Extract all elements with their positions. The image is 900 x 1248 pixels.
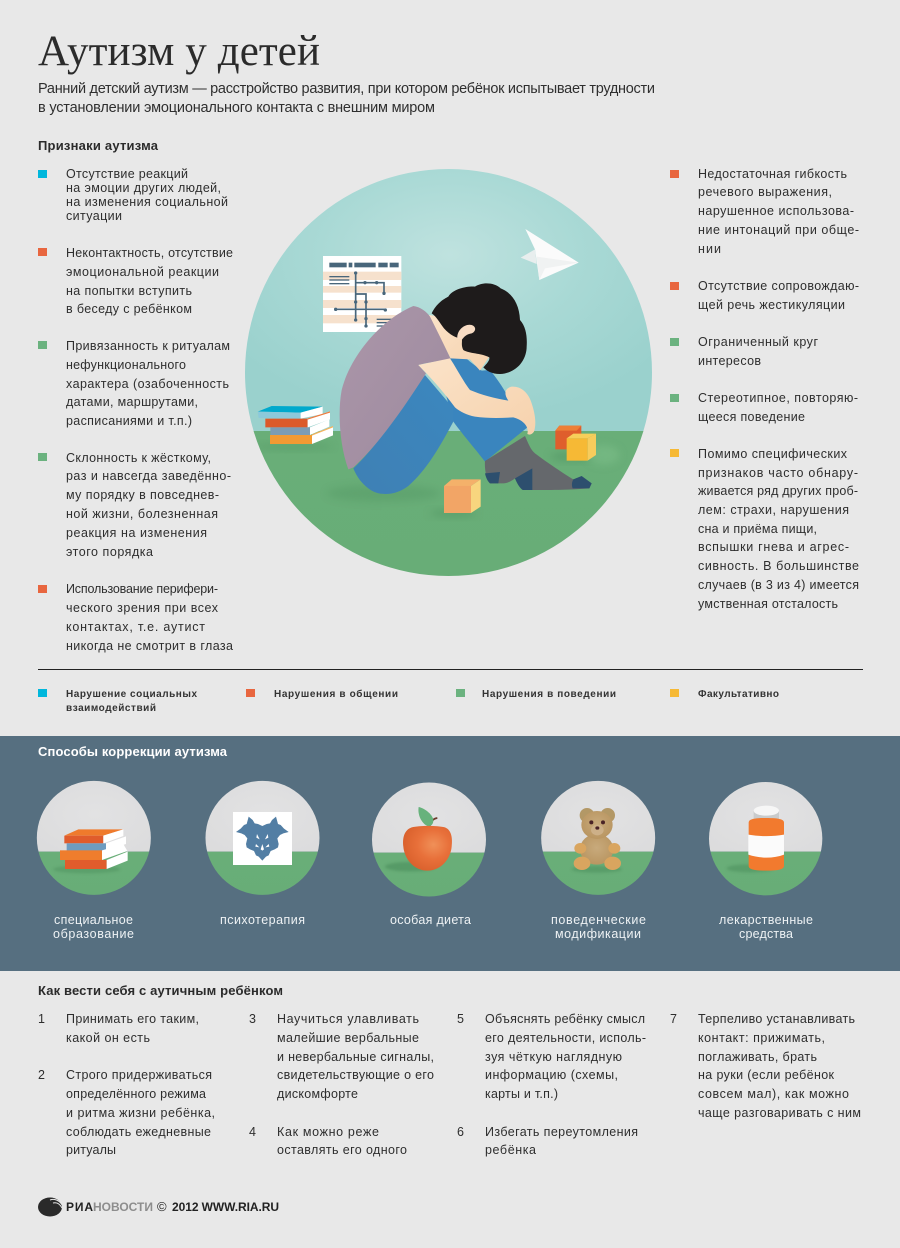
tip 5: зуя чёткую наглядную	[485, 1050, 622, 1064]
sign r5: лем: страхи, нарушения	[698, 503, 849, 517]
icon: apple	[370, 780, 490, 899]
caption: behaviour: поведенческие	[551, 913, 646, 927]
sign 5: никогда не смотрит в глаза	[66, 639, 233, 653]
legend: Нарушения в поведении	[482, 689, 616, 700]
tip 7: совсем мал), как можно	[698, 1087, 849, 1101]
tip 2: определённого режима	[66, 1087, 206, 1101]
tip 6: ребёнка	[485, 1143, 536, 1157]
sign 3	[38, 339, 230, 428]
sign 1: на эмоции других людей,	[66, 181, 221, 195]
tip 2: Строго придерживаться	[66, 1068, 212, 1082]
tip 4	[249, 1125, 407, 1157]
floor	[254, 431, 644, 576]
sign 2: на попытки вступить	[66, 284, 192, 298]
sign 1: на изменения социальной	[66, 195, 228, 209]
tip 2: и ритма жизни ребёнка,	[66, 1106, 215, 1120]
tip 5	[457, 1012, 646, 1101]
sign r1: нии	[698, 242, 721, 256]
main illustration: child in circle	[240, 160, 660, 581]
wall	[240, 160, 660, 431]
subtitle: Ранний детский аутизм — расстройство развития, при котором ребёнок испытывает трудности	[38, 81, 655, 97]
sign r1: ние интонаций при обще-	[698, 223, 859, 237]
tip 3: малейшие вербальные	[277, 1031, 419, 1045]
footer logo: 2012 WWW.RIA.RU	[172, 1200, 279, 1214]
tip 3: 3	[249, 1012, 256, 1026]
sign 2	[38, 246, 233, 316]
icon: stack of books	[258, 406, 333, 444]
sign 4	[38, 451, 231, 559]
far leg	[440, 355, 528, 462]
sign 4: Склонность к жёсткому,	[66, 451, 211, 465]
sign 2: в беседу с ребёнком	[66, 302, 192, 316]
sign r2	[670, 279, 859, 312]
sign r5: сна и приёма пищи,	[698, 522, 817, 536]
caption: behaviour	[551, 913, 646, 941]
poster: timetable	[323, 256, 401, 332]
sign 5	[38, 582, 233, 653]
legend: взаимодействий	[66, 703, 156, 714]
near leg	[353, 375, 453, 494]
tip 1	[38, 1012, 199, 1045]
sign r5: живается ряд других проб-	[698, 484, 858, 498]
sign 3: характера (озабоченность	[66, 377, 229, 391]
sign 4: раз и навсегда заведённо-	[66, 469, 231, 483]
caption: medication: лекарственные	[719, 913, 813, 927]
tip 5: карты и т.п.)	[485, 1087, 558, 1101]
sign r1: речевого выражения,	[698, 185, 832, 199]
sign 4: реакция на изменения	[66, 526, 207, 540]
arm	[418, 358, 535, 435]
tip 2: 2	[38, 1068, 45, 1082]
sign r5: вспышки гнева и агрес-	[698, 540, 849, 554]
sign r5: сивность. В большинстве	[698, 559, 859, 573]
hair	[432, 283, 527, 374]
panel: correction methods	[0, 736, 900, 971]
tip 7: поглаживать, брать	[698, 1050, 817, 1064]
sign r4: Стереотипное, повторяю-	[698, 391, 858, 405]
footer logo	[38, 1198, 279, 1216]
subtitle: в установлении эмоционального контакта с внешним миром	[38, 100, 435, 116]
sign 1: Отсутствие реакций	[66, 167, 188, 181]
sign 4: ной жизни, болезненная	[66, 507, 218, 521]
icon: paper plane	[521, 229, 579, 280]
tip 7: контакт: прижимать,	[698, 1031, 825, 1045]
sign r4	[670, 391, 858, 424]
caption: medication: средства	[739, 927, 793, 941]
sign r5: умственная отсталость	[698, 597, 838, 611]
tip 3: свидетельствующие о его	[277, 1068, 434, 1082]
caption: education: специальное	[54, 913, 133, 927]
sign 1: ситуации	[66, 209, 122, 223]
tip 5: его деятельности, исполь-	[485, 1031, 646, 1045]
tip 1: какой он есть	[66, 1031, 150, 1045]
sign 3: Привязанность к ритуалам	[66, 339, 230, 353]
caption: behaviour: модификации	[555, 927, 641, 941]
toy block: orange	[444, 479, 481, 513]
tip 3: Научиться улавливать	[277, 1012, 419, 1026]
icon: medicine bottle	[707, 780, 825, 897]
tip 5: Объяснять ребёнку смысл	[485, 1012, 645, 1026]
subtitle	[38, 81, 655, 116]
sign r1: нарушенное использова-	[698, 204, 854, 218]
sign r3: Ограниченный круг	[698, 335, 818, 349]
tip 7: на руки (если ребёнок	[698, 1068, 835, 1082]
tip 4: 4	[249, 1125, 256, 1139]
ear	[457, 325, 475, 340]
sign r1	[670, 167, 859, 256]
tip 7	[670, 1012, 861, 1120]
tip 2: ритуалы	[66, 1143, 116, 1157]
heading: signs: Признаки аутизма	[38, 138, 159, 153]
tip 6: 6	[457, 1125, 464, 1139]
icon: teddy bear	[540, 780, 657, 897]
sign 4: этого порядка	[66, 545, 153, 559]
tip 1: 1	[38, 1012, 45, 1026]
tip 5: 5	[457, 1012, 464, 1026]
sign 5: контактах, т.е. аутист	[66, 620, 205, 634]
legend: Нарушения в общении	[274, 688, 398, 700]
sign r4: щееся поведение	[698, 410, 805, 424]
caption: medication	[719, 913, 813, 941]
sign r5: признаков часто обнару-	[698, 466, 858, 480]
legend: Нарушение социальных	[66, 689, 197, 700]
caption: psychotherapy: психотерапия	[220, 913, 305, 927]
sign 5: Использование перифери-	[66, 582, 218, 596]
tip 5: информацию (схемы,	[485, 1068, 618, 1082]
sign 3: датами, маршрутами,	[66, 395, 198, 409]
tip 7: Терпеливо устанавливать	[698, 1012, 855, 1026]
sign r1: Недостаточная гибкость	[698, 167, 847, 181]
legend: Факультативно	[698, 689, 779, 700]
caption: diet: особая диета	[390, 913, 471, 927]
footer logo: НОВОСТИ	[93, 1200, 153, 1214]
footer logo: ©	[157, 1199, 167, 1214]
toy block: red and yellow	[555, 426, 596, 461]
tip 2	[38, 1068, 215, 1157]
heading: correction: Способы коррекции аутизма	[38, 744, 228, 759]
tip 1: Принимать его таким,	[66, 1012, 199, 1026]
icon: inkblot	[206, 780, 320, 895]
sign r5	[670, 447, 859, 611]
icon: globe	[38, 1198, 62, 1216]
tip 2: соблюдать ежедневные	[66, 1125, 211, 1139]
neck and face	[428, 315, 489, 371]
sign 1	[38, 167, 228, 223]
sign r3	[670, 335, 818, 368]
sign 3: расписаниями и т.п.)	[66, 414, 192, 428]
tip 3: дискомфорте	[277, 1087, 358, 1101]
tip 4: Как можно реже	[277, 1125, 379, 1139]
tip 6: Избегать переутомления	[485, 1125, 638, 1139]
tip 3: и невербальные сигналы,	[277, 1050, 434, 1064]
socks	[485, 436, 592, 490]
footer logo: РИА	[66, 1200, 93, 1214]
tip 7: чаще разговаривать с ним	[698, 1106, 861, 1120]
caption: education: образование	[53, 927, 134, 941]
heading: how to behave: Как вести себя с аутичным ребёнком	[38, 983, 283, 998]
tip 3	[249, 1012, 434, 1101]
sign 2: эмоциональной реакции	[66, 265, 219, 279]
sign 5: ческого зрения при всех	[66, 601, 219, 615]
caption: education	[53, 913, 134, 941]
sign r5: Помимо специфических	[698, 447, 848, 461]
tip 4: оставлять его одного	[277, 1143, 407, 1157]
legend	[38, 688, 779, 714]
sign 4: му порядку в повседнев-	[66, 488, 219, 502]
child figure	[340, 283, 592, 494]
sign r2: щей речь жестикуляции	[698, 298, 845, 312]
shirt	[340, 306, 451, 469]
icon: books	[36, 780, 151, 895]
tip 7: 7	[670, 1012, 677, 1026]
tip 6	[457, 1125, 638, 1157]
title: Аутизм у детей	[38, 28, 320, 75]
sign r5: случаев (в 3 из 4) имеется	[698, 578, 859, 592]
sign r2: Отсутствие сопровождаю-	[698, 279, 859, 293]
sign 2: Неконтактность, отсутствие	[66, 246, 233, 260]
sign r3: интересов	[698, 354, 761, 368]
sign 3: нефункционального	[66, 358, 186, 372]
